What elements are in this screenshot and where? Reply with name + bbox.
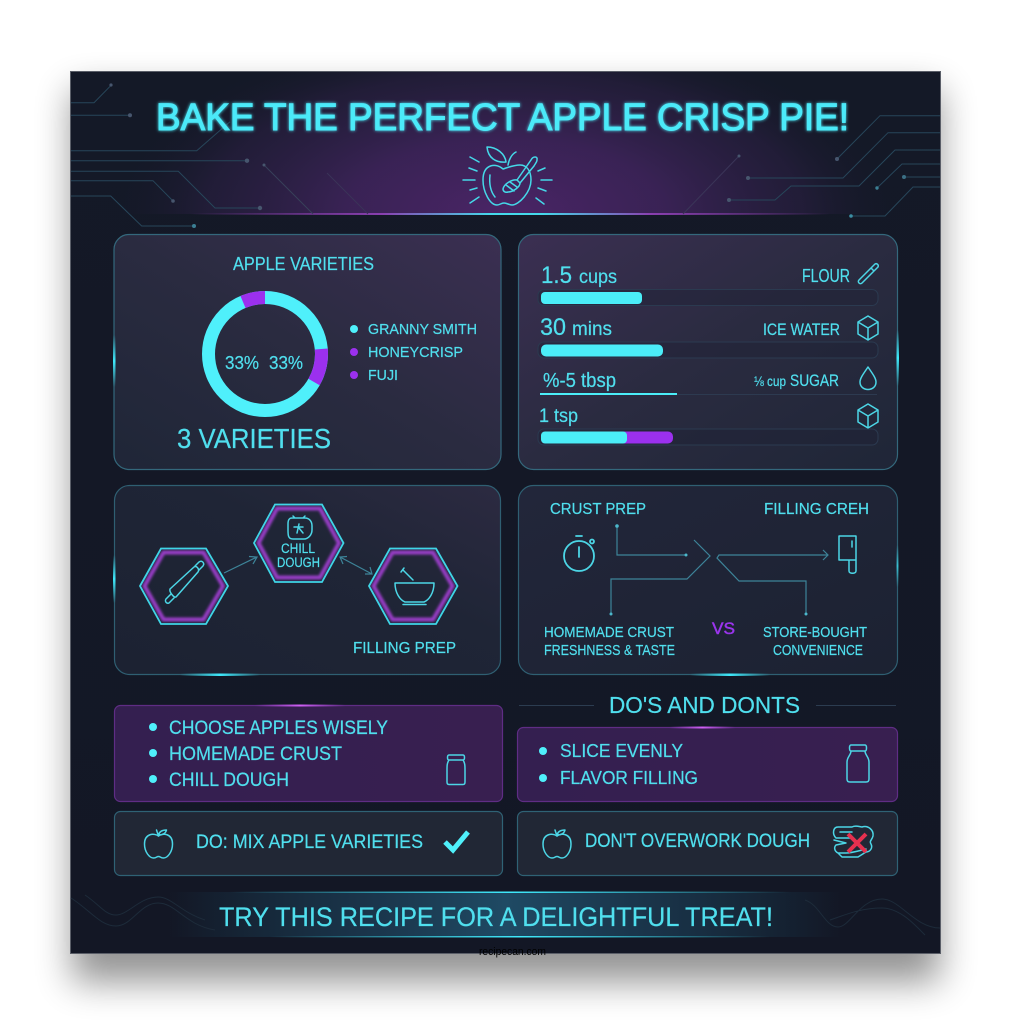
row: ice water: ICE WATER <box>763 320 840 339</box>
bullet list <box>149 717 388 791</box>
row: sugar: ⅛ cup <box>754 373 786 389</box>
row: flour: cups <box>579 267 617 288</box>
closing message: TRY THIS RECIPE FOR A DELIGHTFUL TREAT! <box>219 902 773 932</box>
panel: tips right <box>518 726 898 802</box>
circuit lines: right <box>683 116 940 218</box>
donut chart <box>208 298 322 410</box>
donut labels <box>225 353 303 373</box>
icon: cleaver <box>839 536 856 573</box>
step: mixing bowl hexagon <box>369 548 458 624</box>
panel: crust vs filling comparison <box>518 486 898 676</box>
vs label: VS <box>712 619 735 638</box>
panel: ingredient amounts <box>518 234 899 470</box>
row: ice water: mins <box>572 319 612 340</box>
step: chill dough hexagon: CHILL <box>281 541 315 556</box>
row: sugar: %-5 tbsp <box>543 370 616 392</box>
row: ice water: 30 <box>540 314 566 341</box>
icon: apple <box>144 830 172 858</box>
text: don't overwork dough: DON'T OVERWORK DOUGH <box>585 831 810 852</box>
step: rolling pin hexagon <box>140 548 228 624</box>
row: flour <box>538 262 878 306</box>
heading: apple varieties: APPLE VARIETIES <box>233 254 374 274</box>
poster background <box>70 72 940 954</box>
donut labels: 33% <box>225 353 259 373</box>
row: sugar: SUGAR <box>790 372 839 390</box>
panel: don't tip <box>518 812 898 876</box>
arrow: rolling pin to chill dough <box>224 556 257 573</box>
icon: stopwatch <box>564 536 594 571</box>
icon: jar <box>447 755 465 784</box>
step: chill dough hexagon: DOUGH <box>277 555 320 570</box>
heading: do's and donts: DO'S AND DONTS <box>609 692 800 718</box>
card drop shadow <box>72 90 940 982</box>
text: homemade crust: HOMEMADE CRUST <box>544 625 674 641</box>
icon: overworked dough with red cross <box>834 826 873 857</box>
icon: apple with whisk <box>463 147 552 205</box>
step: chill dough hexagon <box>254 504 344 582</box>
panel: process hexagons <box>113 486 500 676</box>
icon: check mark <box>445 832 468 850</box>
bullet list: SLICE EVENLY <box>560 740 683 761</box>
bullet list: FLAVOR FILLING <box>560 767 698 788</box>
bullet list: HOMEMADE CRUST <box>169 743 342 765</box>
legend: GRANNY SMITH <box>368 321 477 338</box>
label: crust prep: CRUST PREP <box>550 501 646 518</box>
legend: HONEYCRISP <box>368 344 463 361</box>
circuit lines: left <box>71 83 368 228</box>
title: BAKE THE PERFECT APPLE CRISP PIE! <box>156 97 849 139</box>
label: filling prep: FILLING PREP <box>353 640 456 657</box>
donut labels: 33% <box>269 353 303 373</box>
bullet list: CHILL DOUGH <box>169 769 289 791</box>
legend <box>350 321 477 384</box>
row: flour: 1.5 <box>541 262 572 289</box>
text: homemade crust: FRESHNESS & TASTE <box>544 643 675 659</box>
connector lines <box>610 524 828 616</box>
row: ice water <box>538 314 878 358</box>
text: store-bought: STORE-BOUGHT <box>763 625 867 641</box>
footer banner <box>71 892 940 938</box>
text: mix apple varieties: DO: MIX APPLE VARIETIES <box>196 832 423 853</box>
panel: apple varieties <box>113 234 501 470</box>
icon: bottle <box>847 745 869 782</box>
arrow: chill dough to filling prep <box>340 556 372 574</box>
row: one teaspoon: 1 tsp <box>539 405 578 427</box>
row: flour: FLOUR <box>802 266 850 286</box>
label: filling creh: FILLING CREH <box>764 501 869 518</box>
icon: apple <box>543 830 571 858</box>
text: store-bought <box>763 625 867 659</box>
watermark: recipecan.com <box>479 946 546 958</box>
panel: do tip <box>114 812 502 876</box>
row: sugar <box>540 367 877 395</box>
text: store-bought: CONVENIENCE <box>773 643 863 659</box>
bullet list: CHOOSE APPLES WISELY <box>169 717 388 739</box>
legend: FUJI <box>368 367 398 384</box>
stat: 3 varieties: 3 VARIETIES <box>177 423 331 454</box>
text: homemade crust <box>544 625 675 659</box>
row: one teaspoon <box>538 404 878 445</box>
panel: tips left <box>114 704 502 802</box>
bullet list <box>539 740 698 788</box>
